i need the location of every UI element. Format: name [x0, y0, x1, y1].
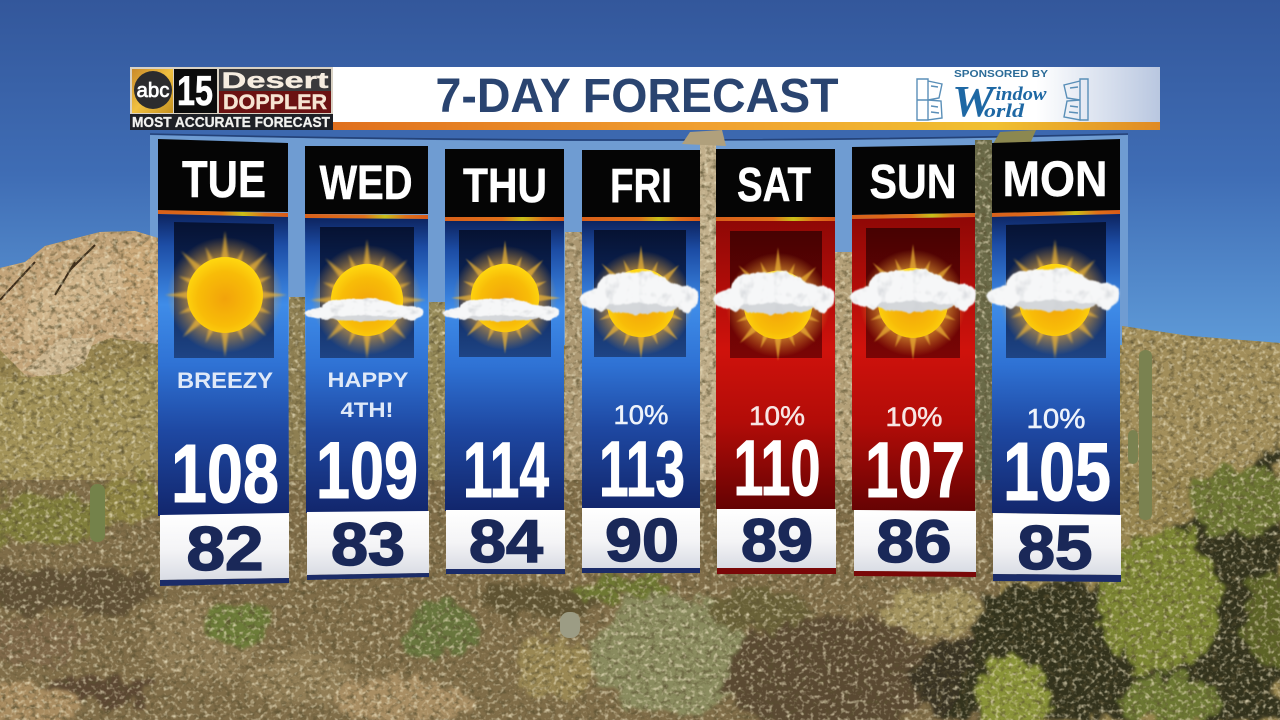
column: TUE: 82 [186, 515, 264, 584]
column: FRI: 10% [614, 400, 668, 430]
column: WED: 83 [331, 511, 405, 578]
column: TUE: BREEZY [177, 368, 273, 393]
column: MON: 85 [1018, 514, 1092, 583]
station logo: DOPPLER [223, 91, 327, 114]
column: SUN: SUN [870, 156, 956, 209]
column: TUE: TUE [182, 151, 266, 209]
weather icon: sun [165, 222, 287, 358]
weather icon: sun with cloud [987, 222, 1119, 359]
column: FRI: 90 [605, 507, 679, 574]
column: SAT: 110 [734, 423, 820, 512]
weather icon: sun with cloud [443, 230, 561, 357]
column: THU: 84 [469, 508, 544, 575]
sponsor: Window World: indow [996, 84, 1047, 105]
icon: right window [1064, 79, 1088, 120]
sponsor: Window World: SPONSORED BY [954, 68, 1048, 80]
column: SUN: 107 [865, 425, 965, 514]
column: TUE: 108 [171, 427, 279, 520]
column: SAT: SAT [737, 159, 811, 212]
column: FRI: 113 [599, 424, 685, 513]
column: TUE [158, 139, 289, 586]
column: SAT: 10% [749, 401, 805, 431]
weather icon: sun with cloud [850, 228, 976, 360]
column: WED: 4TH! [340, 399, 394, 422]
column: SUN [850, 145, 976, 577]
column: FRI: FRI [610, 160, 672, 213]
station logo [130, 67, 333, 131]
column: WED: HAPPY [328, 369, 408, 392]
column: SAT: 89 [741, 507, 813, 574]
sky [0, 0, 1280, 350]
weather icon: sun with cloud [305, 227, 426, 359]
frosted frame band [150, 135, 1128, 340]
cacti [1139, 350, 1152, 520]
sponsor: Window World [917, 68, 1088, 126]
sponsor: Window World: orld [984, 101, 1025, 122]
saguaro tops [682, 130, 726, 146]
column: MON: 10% [1026, 403, 1086, 434]
column: THU: 114 [463, 425, 549, 514]
icon: left window [917, 79, 942, 120]
weather icon: sun with cloud [580, 230, 698, 359]
weather icon: sun with cloud [714, 231, 834, 361]
station logo: 15 [177, 67, 213, 114]
title banner [130, 67, 1160, 130]
column: WED: 109 [316, 426, 418, 516]
day header [158, 139, 288, 212]
shrub masses [0, 440, 1280, 720]
gap strips [289, 297, 305, 480]
column: MON: 105 [1003, 425, 1111, 518]
column: SUN: 86 [876, 508, 952, 575]
abc circle: abc [136, 80, 170, 102]
column: MON [987, 139, 1121, 583]
column: FRI [580, 150, 700, 574]
column: THU: THU [463, 160, 547, 213]
station logo: Desert [222, 68, 330, 93]
right hillside [1122, 326, 1280, 470]
column: SAT [714, 149, 836, 574]
column: MON: MON [1002, 151, 1108, 207]
station logo: MOST ACCURATE FORECAST [132, 115, 330, 131]
sponsor: Window World: W [952, 77, 997, 126]
left rock face [0, 226, 165, 380]
column: WED: WED [320, 157, 412, 210]
title: 7-DAY FORECAST [436, 70, 838, 123]
column: WED [305, 146, 429, 580]
column: THU [443, 149, 565, 575]
abc circle [134, 71, 172, 109]
column: SUN: 10% [886, 402, 942, 432]
